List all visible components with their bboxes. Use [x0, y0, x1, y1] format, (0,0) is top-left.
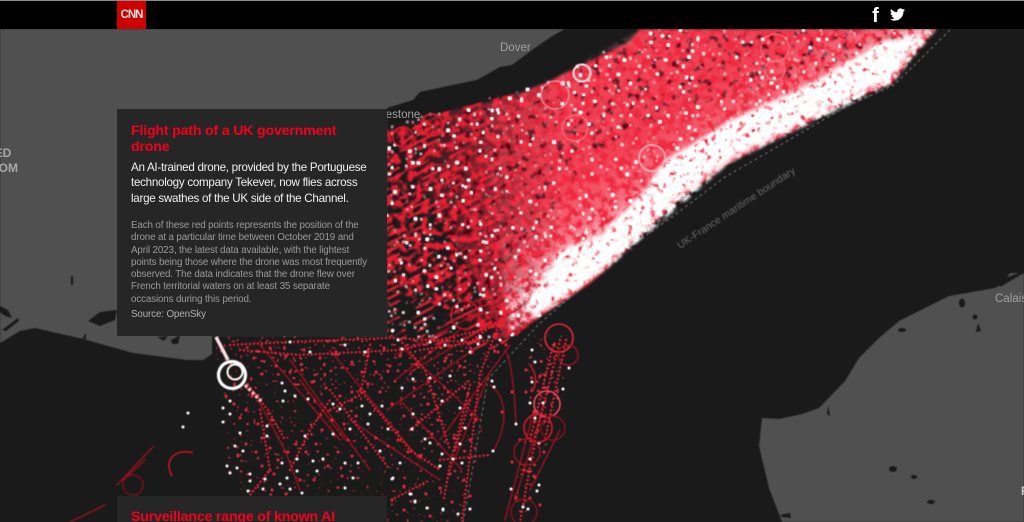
land: France: [759, 273, 1024, 522]
flight points: white high-frequency core: [525, 32, 925, 318]
panel detail text: French territorial waters on at least 35 separate: [131, 281, 330, 292]
label: maritime boundary: UK-France maritime boundary: [676, 165, 798, 252]
label: Dover: Dover: [500, 42, 531, 54]
panel detail text: points being those where the drone was most frequently: [131, 257, 367, 268]
flight points: noise of red points along the eastern column: [510, 335, 572, 522]
panel summary: [131, 161, 366, 205]
flight points: noise of red points in the upper south: [213, 336, 505, 400]
panel source: Source: OpenSky: [131, 309, 206, 320]
inland water on the French coast: [780, 271, 1024, 518]
panel title: [131, 123, 336, 155]
flight points: pink mottling: [480, 29, 936, 330]
flight tracks: southern lines: [70, 300, 560, 522]
flight points: noise of red points in the lower south: [222, 380, 490, 522]
panel: surveillance range: [117, 496, 387, 522]
panel detail text: occasions during this period.: [131, 294, 251, 304]
panel detail text: observed. The data indicates that the drone flew over: [131, 269, 355, 280]
panel summary: large swathes of the UK side of the Channel.: [131, 192, 349, 205]
panel: flight path of a UK government drone: [117, 109, 387, 336]
flight points: white points over the band: [387, 29, 936, 340]
circling flight tracks: [123, 34, 789, 522]
panel summary: technology company Tekever, now flies across: [131, 176, 357, 189]
flight points: network on the western side: [387, 92, 600, 345]
panel title: Flight path of a UK government: [131, 123, 336, 139]
UK-France maritime boundary line: [463, 30, 950, 522]
flight tracks: parallel western streaks: [387, 92, 560, 355]
panel detail text: [131, 220, 367, 304]
CNN logo: [117, 1, 146, 29]
icon: twitter: [890, 8, 905, 21]
flight tracks: bright dotted chains: [230, 300, 566, 522]
panel title: drone: [131, 139, 169, 155]
flight points: scattered white points: [183, 335, 569, 514]
panel detail text: April 2023, the latest data available, with the lightest: [131, 244, 349, 256]
flight points: dense red band: [387, 29, 936, 340]
icon: facebook: f: [872, 5, 879, 27]
panel summary: An AI-trained drone, provided by the Portuguese: [131, 161, 366, 174]
inland water on the UK coast: [0, 57, 534, 344]
flight points: dark gaps between passes: [440, 32, 930, 320]
land: United Kingdom: [0, 29, 565, 360]
label: United Kingdom: [0, 146, 18, 175]
bright white circling track near the coast: [215, 337, 262, 402]
navigation bar: [0, 0, 1024, 29]
panel detail text: drone at a particular time between October 2019 and: [131, 232, 354, 243]
CNN logo: CNN: [121, 9, 142, 21]
label: Folkestone: Folkestone: [364, 109, 420, 121]
panel detail text: Each of these red points represents the position of the: [131, 220, 359, 231]
flight points: scattered red points: [226, 345, 552, 516]
